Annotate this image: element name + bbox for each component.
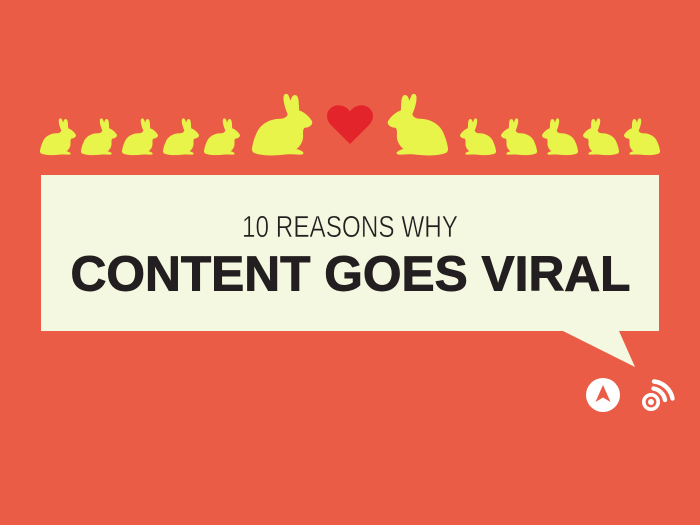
rabbits: right row bbox=[388, 94, 660, 155]
icon: RSS feed bbox=[644, 382, 672, 409]
rabbits: left row bbox=[40, 94, 312, 155]
icon: navigation arrow badge bbox=[586, 378, 620, 412]
subtitle: 10 REASONS WHY bbox=[242, 210, 458, 244]
icon: heart bbox=[328, 106, 372, 143]
title: CONTENT GOES VIRAL bbox=[70, 248, 630, 302]
speech bubble bbox=[41, 175, 659, 367]
